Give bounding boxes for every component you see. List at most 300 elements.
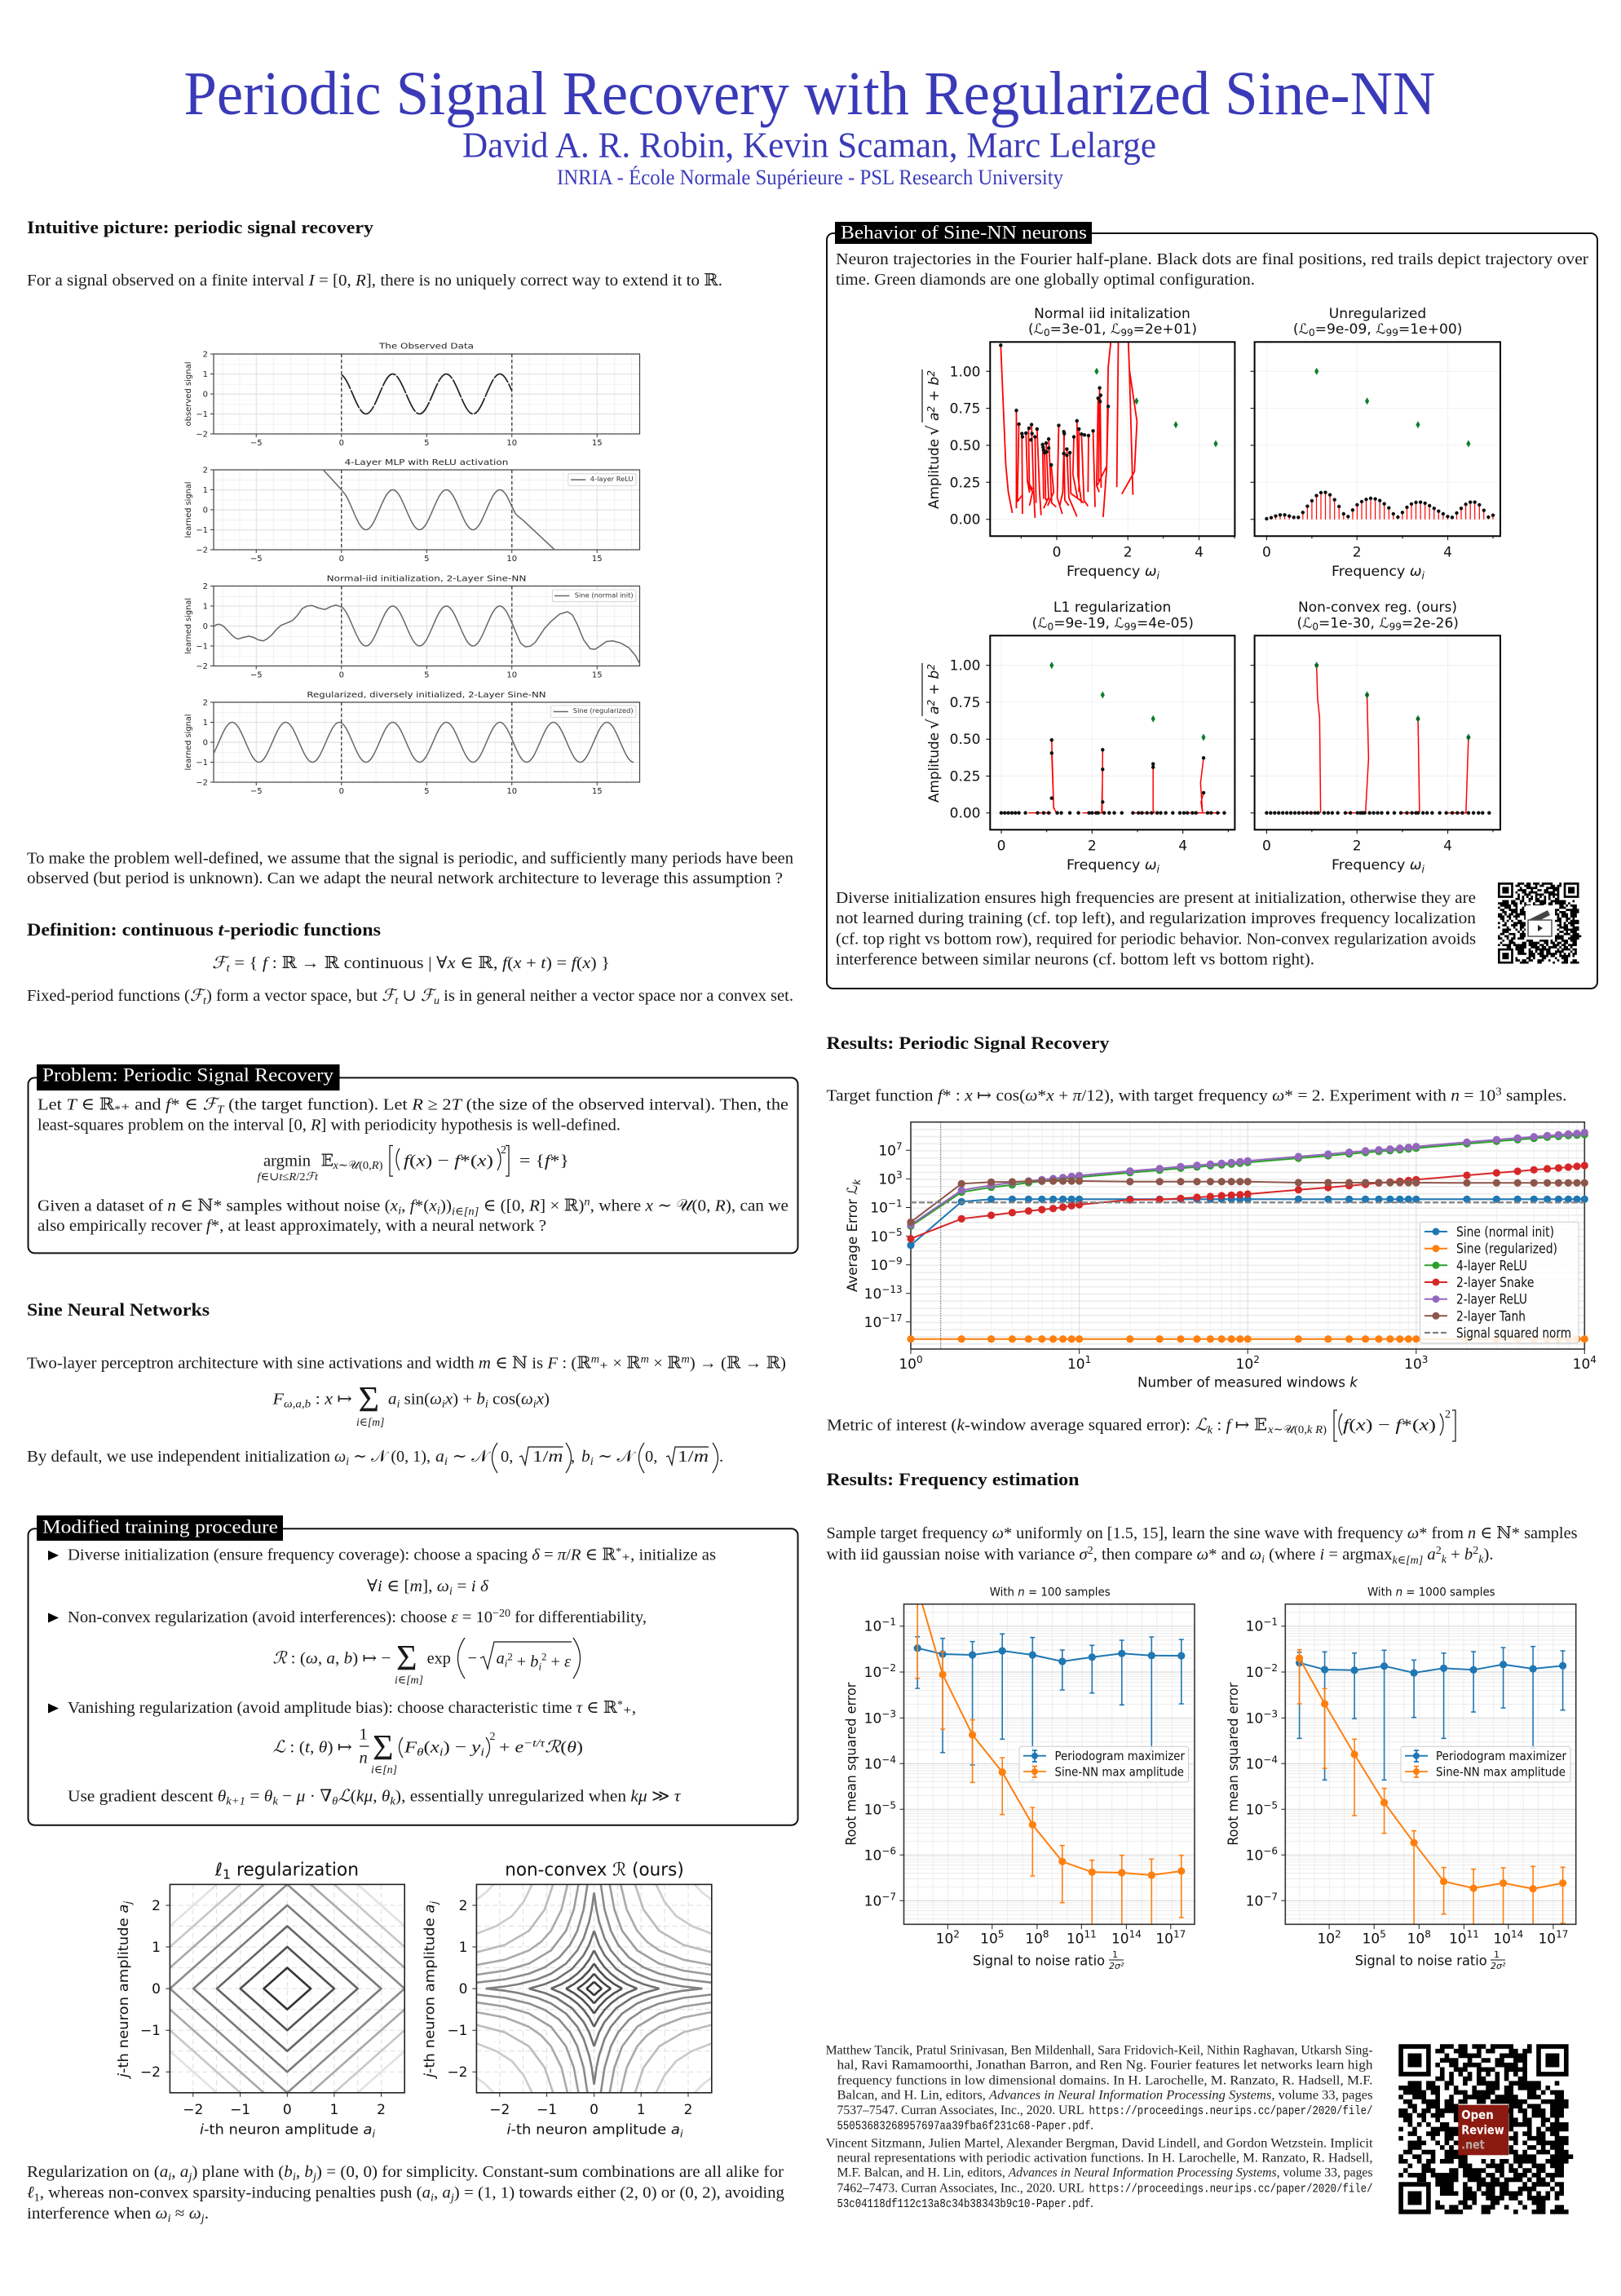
text: problem statement: R ≥ 2T (the size of the observed interval). Then, the bbox=[412, 1095, 761, 1113]
chart: average error vs windows: 10 bbox=[1236, 1356, 1253, 1373]
chart: frequency error with n=1000: −3 bbox=[1263, 1708, 1278, 1719]
text: regularization explanation bbox=[27, 2163, 784, 2225]
chart: non-convex regularization contours: −2 bbox=[447, 2064, 468, 2081]
text: default initialization: 0, bbox=[645, 1448, 657, 1466]
chart: frequency error with n=100: 17 bbox=[1173, 1929, 1186, 1940]
chart: frequency error with n=100: 14 bbox=[1129, 1929, 1142, 1940]
text: default initialization: i bbox=[346, 1456, 349, 1468]
chart: 4-layer MLP: 10 bbox=[506, 555, 517, 564]
bullet: non-convex regularization: Non-convex regularization (avoid interferences): choose ε = 10 bbox=[68, 1608, 492, 1626]
chart: non-convex regularization neurons: =2e-26) bbox=[1402, 615, 1459, 631]
chart: normal iid initialization: a bbox=[926, 413, 943, 421]
legend: 2-layer ReLU bbox=[1456, 1292, 1527, 1308]
affiliation: INRIA - École Normale Supérieure - PSL Research University bbox=[557, 166, 1063, 189]
heading: sine neural networks: Sine Neural Networks bbox=[27, 1299, 210, 1320]
chart: frequency error with n=1000: With n = 1000 samples bbox=[1367, 1586, 1495, 1599]
chart: normal iid initialization: 99 bbox=[1120, 327, 1133, 338]
bullet: vanishing regularization: Vanishing regularization (avoid amplitude bias): choose characteristic time τ ∈ ℝ bbox=[68, 1699, 617, 1717]
bullet: diverse initialization: = bbox=[453, 1577, 471, 1595]
chart: regularized sine NN: 10 bbox=[506, 787, 517, 796]
chart: frequency error with n=100: With n = 100 samples bbox=[990, 1586, 1111, 1599]
chart: normal-iid sine NN: −2 bbox=[196, 662, 208, 671]
chart: normal iid initialization: 2 bbox=[925, 406, 937, 413]
chart: l1 regularization contours: 1 bbox=[329, 2102, 338, 2118]
formula: periodic function space: t bbox=[227, 962, 231, 975]
text: sample target frequency: 2 bbox=[1088, 1545, 1093, 1557]
chart: L1 regularization neurons: =4e-05) bbox=[1137, 615, 1194, 631]
text: sample target frequency: ω* and ω bbox=[1197, 1546, 1261, 1564]
text: neuron trajectories: time. Green diamonds are one globally optimal configuration. bbox=[836, 271, 1255, 289]
chart: non-convex regularization contours bbox=[422, 1860, 735, 2140]
chart: frequency error with n=100: 10 bbox=[1067, 1931, 1084, 1948]
chart: 4-layer MLP: 5 bbox=[424, 555, 429, 564]
text: regularization explanation: , bbox=[296, 2163, 304, 2181]
text: problem statement bbox=[38, 1095, 788, 1134]
chart: frequency error with n=1000: 10 bbox=[1246, 1802, 1263, 1818]
chart: frequency error with n=100: 10 bbox=[1111, 1931, 1129, 1948]
formula: periodic function space: = { bbox=[230, 954, 263, 972]
chart: frequency error with n=1000: 14 bbox=[1511, 1929, 1523, 1940]
chart: frequency error with n=1000: 10 bbox=[1246, 1847, 1263, 1864]
series: 4-layer ReLU bbox=[911, 1135, 1584, 1226]
text: regularization explanation: a bbox=[442, 2183, 451, 2201]
formula: argmin: = {f*} bbox=[519, 1152, 569, 1170]
chart: frequency error with n=1000: −7 bbox=[1263, 1891, 1278, 1902]
text: fixed-period functions: ℱ bbox=[421, 987, 437, 1005]
chart: frequency error with n=1000: Root mean squared error bbox=[1226, 1683, 1242, 1846]
text: sample target frequency: i = argmax bbox=[1319, 1546, 1392, 1564]
formula: sine network bbox=[272, 1379, 550, 1429]
chart: normal-iid sine NN: 0 bbox=[339, 670, 344, 680]
heading: definition: Definition: continuous t-periodic functions bbox=[27, 919, 381, 940]
bullet: vanishing regularization: = bbox=[245, 1787, 264, 1805]
text: fixed-period functions: ) form a vector space, but bbox=[206, 987, 382, 1005]
chart: observed data: 1 bbox=[203, 370, 208, 379]
chart: normal-iid sine NN bbox=[184, 575, 639, 680]
chart: frequency error with n=1000: 11 bbox=[1467, 1929, 1479, 1940]
chart: observed data: −1 bbox=[196, 410, 208, 419]
bullet: non-convex regularization: − bbox=[468, 1649, 477, 1667]
text: well-defined problem bbox=[27, 849, 793, 887]
bullet: diverse initialization: * bbox=[616, 1546, 621, 1559]
chart: average error vs windows: 10 bbox=[864, 1286, 881, 1303]
text: regularization explanation: i bbox=[431, 2192, 434, 2204]
chart: observed data: 5 bbox=[424, 439, 429, 448]
bullet: vanishing regularization: * bbox=[617, 1699, 623, 1711]
legend: Periodogram maximizer bbox=[1055, 1749, 1186, 1763]
text: two-layer perceptron: ) → (ℝ → ℝ) bbox=[690, 1354, 786, 1372]
chart: non-convex regularization neurons: =1e-30, ℒ bbox=[1318, 615, 1389, 631]
chart: average error vs windows: 4 bbox=[1590, 1354, 1597, 1365]
references: 53c04118df112c13a8c34b38343b9c10-Paper.pdf bbox=[837, 2197, 1091, 2211]
panel heading: problem bbox=[37, 1064, 339, 1090]
text: fixed-period functions: ∪ bbox=[398, 987, 421, 1005]
chart: l1 regularization contours: −1 bbox=[230, 2102, 250, 2118]
legend: Periodogram maximizer bbox=[1436, 1749, 1567, 1763]
bullet: vanishing regularization: θ bbox=[417, 1746, 424, 1758]
chart: L1 regularization neurons: 2 bbox=[925, 664, 937, 670]
chart: frequency error with n=100: 10 bbox=[936, 1931, 953, 1948]
chart: frequency error with n=100: Root mean squared error bbox=[844, 1683, 860, 1846]
icon: OpenReview QR code bbox=[1398, 2044, 1573, 2214]
legend bbox=[1401, 1746, 1570, 1782]
bullet: non-convex regularization: −20 bbox=[492, 1608, 510, 1620]
text: default initialization: ω bbox=[334, 1448, 346, 1466]
panel heading: modified training bbox=[37, 1515, 283, 1541]
chart: L1 regularization neurons: 2 bbox=[1088, 838, 1097, 855]
chart: non-convex regularization neurons: (ℒ bbox=[1296, 615, 1312, 631]
chart: average error vs windows: Number of measured windows k bbox=[1137, 1375, 1358, 1391]
bullet: vanishing regularization: ℒ : (t, θ) ↦ bbox=[272, 1738, 352, 1756]
formula: argmin: f(x) − f*(x) bbox=[404, 1152, 493, 1170]
chart: average error vs windows: k bbox=[851, 1179, 863, 1185]
chart: non-convex regularization neurons: i bbox=[1422, 864, 1425, 875]
text: regularization explanation: j bbox=[311, 2171, 316, 2183]
bullet: diverse initialization: ₊, initialize as bbox=[621, 1546, 716, 1564]
chart: unregularized: =9e-09, ℒ bbox=[1315, 321, 1386, 338]
legend: Sine-NN max amplitude bbox=[1436, 1765, 1566, 1780]
chart: non-convex regularization neurons: 0 bbox=[1262, 838, 1271, 855]
chart: unregularized: (ℒ bbox=[1293, 321, 1309, 338]
bullet: non-convex regularization: + bbox=[513, 1652, 530, 1670]
chart: frequency error with n=100: 10 bbox=[864, 1710, 881, 1727]
references: 7462–7473. Curran Associates, Inc., 2020. URL bbox=[837, 2181, 1084, 2195]
chart: regularized sine NN: 0 bbox=[203, 739, 208, 747]
references: https://proceedings.neurips.cc/paper/2020/file/ bbox=[1089, 2182, 1373, 2196]
chart: regularized sine NN: −5 bbox=[250, 787, 263, 796]
chart: l1 regularization contours: −1 bbox=[140, 2023, 161, 2039]
formula: sine network: ω,a,b bbox=[284, 1398, 311, 1410]
chart: average error vs windows: −5 bbox=[888, 1227, 903, 1238]
chart: L1 regularization neurons: 4 bbox=[1178, 838, 1187, 855]
text: regularization explanation: a bbox=[180, 2163, 188, 2181]
references: . bbox=[1090, 2196, 1093, 2210]
chart: observed data bbox=[184, 343, 639, 448]
chart: frequency error with n=1000: −2 bbox=[1263, 1662, 1278, 1674]
chart: L1 regularization neurons: L1 regularization bbox=[1053, 599, 1171, 616]
text: sample target frequency: b bbox=[1464, 1546, 1473, 1564]
formula: sine network: i bbox=[533, 1398, 537, 1410]
text: default initialization: a bbox=[435, 1448, 444, 1466]
authors: David A. R. Robin, Kevin Scaman, Marc Lelarge bbox=[462, 126, 1156, 166]
chart: average error vs windows: 10 bbox=[1404, 1356, 1422, 1373]
chart: average error vs windows: −13 bbox=[881, 1284, 903, 1295]
chart: 4-layer MLP: −1 bbox=[196, 526, 208, 535]
chart: L1 regularization neurons: 0.50 bbox=[950, 732, 980, 748]
text: two-layer perceptron: m bbox=[681, 1354, 690, 1365]
chart: 4-layer MLP: 0 bbox=[203, 506, 208, 515]
chart: regularized sine NN bbox=[184, 691, 639, 796]
formula: argmin: x∼𝒰(0,R) bbox=[332, 1160, 383, 1172]
chart: non-convex regularization contours: i-th neuron amplitude a bbox=[507, 2122, 679, 2139]
chart: normal iid initialization: 0.00 bbox=[950, 512, 980, 529]
text: default initialization: ∼ 𝒩 bbox=[594, 1448, 637, 1466]
chart: frequency error with n=100: 10 bbox=[864, 1665, 881, 1681]
chart: l1 regularization contours: 1 bbox=[152, 1940, 161, 1956]
chart: observed data: 10 bbox=[506, 439, 517, 448]
chart: normal iid initialization: (ℒ bbox=[1028, 321, 1044, 338]
formula: sine network: ) + b bbox=[453, 1390, 485, 1408]
text: initialization and regularization discussion: not learned during training (cf. top left), and regularization improves frequency localization bbox=[836, 909, 1476, 927]
text: regularization explanation: ) plane with ( bbox=[192, 2163, 284, 2181]
text: regularization explanation: b bbox=[304, 2163, 313, 2181]
legend: Sine (normal init) bbox=[1456, 1224, 1554, 1241]
text: two-layer perceptron: m bbox=[641, 1354, 649, 1365]
bullet: vanishing regularization: ( bbox=[424, 1738, 431, 1756]
bullet: vanishing regularization: F bbox=[404, 1738, 417, 1756]
bullet: vanishing regularization: y bbox=[470, 1738, 481, 1756]
formula: sine network: ω bbox=[521, 1390, 533, 1408]
chart: frequency error with n=100: −7 bbox=[881, 1891, 896, 1902]
chart: observed data: −2 bbox=[196, 431, 208, 439]
text: initialization and regularization discussion: (cf. top right vs bottom row), required for periodic behavior. Non-convex regularization avoids bbox=[836, 931, 1476, 949]
text: default initialization: ∼ 𝒩 (0, 1), bbox=[349, 1448, 431, 1466]
panel heading: problem: Problem: Periodic Signal Recovery bbox=[42, 1065, 334, 1086]
text: sample target frequency: k∈[m] bbox=[1393, 1555, 1423, 1567]
text: target function: samples. bbox=[1502, 1086, 1567, 1104]
bullet: non-convex regularization: exp bbox=[427, 1649, 451, 1667]
text: metric of interest: Metric of interest ( k-window average squared error): ℒ bbox=[827, 1416, 1207, 1434]
text: default initialization: 1/m bbox=[532, 1448, 563, 1466]
text: metric of interest: f ↦ 𝔼 bbox=[1226, 1416, 1266, 1434]
chart: non-convex regularization contours: −2 bbox=[489, 2102, 510, 2118]
text: problem statement: least-squares problem on the interval [0, R] with periodicity hypothesis is well-defined. bbox=[38, 1116, 621, 1134]
chart: normal-iid sine NN: 2 bbox=[203, 582, 208, 591]
formula: sine network: sin( bbox=[400, 1390, 430, 1408]
chart: non-convex regularization neurons: Non-convex reg. (ours) bbox=[1298, 599, 1457, 616]
formula: sine network: cos( bbox=[488, 1390, 521, 1408]
chart: L1 regularization neurons: (ℒ bbox=[1032, 615, 1048, 631]
references bbox=[826, 2043, 1373, 2211]
bullet: non-convex regularization: ℛ : (ω, a, b) ↦ − bbox=[272, 1649, 391, 1667]
chart: normal-iid sine NN: 10 bbox=[506, 670, 517, 680]
chart: 4-layer MLP: −5 bbox=[250, 555, 263, 564]
chart: observed data: −5 bbox=[250, 439, 263, 448]
text: sample target frequency: 2 bbox=[1436, 1545, 1442, 1557]
chart: L1 regularization neurons: 0.00 bbox=[950, 806, 980, 822]
chart: frequency error with n=100: 10 bbox=[1025, 1931, 1043, 1948]
chart: frequency error with n=100: 10 bbox=[864, 1756, 881, 1772]
chart: normal-iid sine NN: 5 bbox=[424, 670, 429, 680]
legend: 4-layer ReLU bbox=[1456, 1258, 1527, 1274]
chart: normal-iid sine NN: learned signal bbox=[184, 598, 193, 654]
chart: frequency error with n=100: −1 bbox=[881, 1617, 896, 1628]
chart: unregularized: 99 bbox=[1386, 327, 1398, 338]
chart: 4-layer MLP: 2 bbox=[203, 467, 208, 475]
chart: unregularized bbox=[1251, 306, 1500, 582]
bullet: non-convex regularization: ε bbox=[564, 1652, 572, 1670]
chart: frequency error with n=1000: 2 bbox=[1335, 1929, 1341, 1940]
text: default initialization bbox=[27, 1443, 723, 1473]
chart: 4-layer MLP: 4-Layer MLP with ReLU activation bbox=[345, 458, 508, 467]
chart: frequency error with n=1000: −5 bbox=[1263, 1799, 1278, 1811]
chart: frequency error with n=100: 2σ² bbox=[1109, 1961, 1124, 1971]
legend: 2-layer Tanh bbox=[1456, 1308, 1526, 1325]
text: regularization explanation: b bbox=[284, 2163, 293, 2181]
formula: sine network: i bbox=[485, 1398, 488, 1410]
chart: frequency error with n=100: 10 bbox=[1155, 1931, 1173, 1948]
chart: non-convex regularization contours: j-th neuron amplitude a bbox=[422, 1904, 439, 2077]
bullet: vanishing regularization: ℒ bbox=[338, 1787, 351, 1805]
chart: regularized sine NN: Regularized, diversely initialized, 2-Layer Sine-NN bbox=[307, 691, 546, 700]
text: regularization explanation: j bbox=[449, 2192, 454, 2204]
text: regularization explanation: ω bbox=[189, 2205, 201, 2223]
text: regularization explanation: interference when ω bbox=[27, 2205, 167, 2223]
chart: L1 regularization neurons: =9e-19, ℒ bbox=[1053, 615, 1124, 631]
bullet: non-convex regularization: i bbox=[538, 1660, 541, 1672]
text: regularization explanation: ) = (0, 0) for simplicity. Constant-sum combinations are all alike for bbox=[316, 2163, 784, 2181]
chart: frequency error with n=100: 10 bbox=[864, 1893, 881, 1909]
chart: observed data: 2 bbox=[203, 351, 208, 359]
chart: normal iid initialization: =2e+01) bbox=[1133, 321, 1197, 338]
formula: periodic function space: ℱ bbox=[212, 954, 230, 972]
bullet: vanishing regularization: (kμ, θ bbox=[351, 1787, 390, 1805]
icon: OpenReview QR code: .net bbox=[1461, 2138, 1485, 2152]
icon: OpenReview QR code: Open bbox=[1461, 2108, 1494, 2122]
series: sine regularized bbox=[911, 1338, 1584, 1340]
bullet: non-convex regularization: a bbox=[497, 1649, 505, 1667]
chart: frequency error with n=1000: 10 bbox=[1493, 1931, 1511, 1948]
chart: l1 regularization contours: 0 bbox=[283, 2102, 292, 2118]
chart: non-convex regularization contours: i bbox=[680, 2129, 683, 2140]
chart: observed data: 15 bbox=[592, 439, 603, 448]
chart: L1 regularization neurons: 0.25 bbox=[950, 768, 980, 785]
chart: frequency error with n=100: −5 bbox=[881, 1799, 896, 1811]
chart: average error vs windows: 0 bbox=[917, 1354, 923, 1365]
references: Matthew Tancik, Pratul Srinivasan, Ben Mildenhall, Sara Fridovich-Keil, Nithin Raghavan, Utkarsh Sing- bbox=[826, 2043, 1373, 2057]
chart: L1 regularization neurons: 0 bbox=[1048, 621, 1053, 632]
chart: unregularized: 4 bbox=[1443, 545, 1452, 561]
chart: unregularized: 2 bbox=[1353, 545, 1362, 561]
formula: sine network: F bbox=[272, 1390, 284, 1408]
bullet: vanishing regularization: ) − bbox=[444, 1738, 471, 1756]
chart: regularized sine NN: −1 bbox=[196, 759, 208, 768]
chart: normal iid initialization: i bbox=[1157, 570, 1160, 582]
text: target function: Target function f* : x ↦ cos(ω*x + π/12), with target frequency ω* = 2. Experiment with n = 10 bbox=[827, 1086, 1494, 1104]
chart: non-convex regularization contours: 1 bbox=[459, 1940, 468, 1956]
text: fixed-period functions: u bbox=[434, 995, 439, 1007]
text: empirical question: R] × ℝ) bbox=[529, 1197, 583, 1215]
chart: observed data: observed signal bbox=[184, 362, 193, 426]
chart: non-convex regularization contours: 2 bbox=[459, 1898, 468, 1914]
text: fixed-period functions: t bbox=[203, 995, 207, 1007]
text: regularization explanation: j bbox=[200, 2213, 205, 2225]
formula: sine network: i bbox=[442, 1398, 445, 1410]
chart: L1 regularization neurons: 0.75 bbox=[950, 695, 980, 711]
chart: frequency error with n=1000: 10 bbox=[1449, 1931, 1467, 1948]
chart: regularized sine NN: Sine (regularized) bbox=[573, 707, 634, 714]
series: 2-layer ReLU bbox=[911, 1132, 1584, 1225]
chart: regularized sine NN: 1 bbox=[203, 719, 208, 728]
chart: normal-iid sine NN: −5 bbox=[250, 670, 263, 680]
chart: l1 regularization contours: 2 bbox=[377, 2102, 386, 2118]
text: sample target frequency: with iid gaussian noise with variance σ bbox=[827, 1546, 1088, 1564]
chart: average error vs windows: 10 bbox=[878, 1144, 896, 1160]
chart: 4-layer MLP: 15 bbox=[592, 555, 603, 564]
chart: average error vs windows: −1 bbox=[888, 1198, 903, 1210]
bullet: vanishing regularization: i bbox=[480, 1746, 484, 1758]
chart: frequency error with n=100: 10 bbox=[864, 1619, 881, 1635]
chart: normal iid initialization: 1.00 bbox=[950, 364, 980, 380]
text: default initialization: ∼ 𝒩 bbox=[448, 1448, 492, 1466]
chart: frequency error with n=100: −3 bbox=[881, 1708, 896, 1719]
chart: normal-iid sine NN: 1 bbox=[203, 602, 208, 612]
chart: L1 regularization neurons: Amplitude bbox=[926, 732, 943, 803]
text: default initialization: i bbox=[590, 1456, 594, 1468]
chart: normal iid initialization: 0.50 bbox=[950, 438, 980, 454]
text: sample target frequency: 2 bbox=[1473, 1545, 1478, 1557]
chart: average error vs windows: 10 bbox=[1573, 1356, 1590, 1373]
references: hal, Ravi Ramamoorthi, Jonathan Barron, and Ren Ng. Fourier features let networks learn high bbox=[837, 2059, 1373, 2073]
bullet: non-convex regularization: b bbox=[530, 1652, 538, 1670]
text: sample target frequency: , then compare bbox=[1093, 1546, 1197, 1564]
bullet: vanishing regularization: ), essentially unregularized when bbox=[395, 1787, 630, 1805]
chart: average error vs windows: 10 bbox=[870, 1229, 888, 1245]
chart: normal-iid sine NN: Normal-iid initialization, 2-Layer Sine-NN bbox=[327, 575, 526, 584]
formula: sine network: i∈[m] bbox=[356, 1417, 384, 1429]
chart: average error vs windows: 10 bbox=[1067, 1356, 1085, 1373]
chart: normal-iid sine NN: Sine (normal init) bbox=[575, 591, 634, 599]
chart: non-convex regularization contours: j bbox=[429, 1900, 440, 1906]
chart: frequency error with n=1000: 10 bbox=[1538, 1931, 1556, 1948]
bullet: vanishing regularization: k bbox=[390, 1795, 396, 1807]
formula: sine network: ω bbox=[430, 1390, 442, 1408]
legend: Sine-NN max amplitude bbox=[1055, 1765, 1184, 1780]
chart: frequency error with n=1000: −6 bbox=[1263, 1845, 1278, 1856]
chart: normal-iid sine NN: 15 bbox=[592, 670, 603, 680]
bullet: diverse initialization: i δ bbox=[471, 1577, 488, 1595]
series: sine normal init bbox=[911, 1199, 1584, 1245]
legend: 2-layer Snake bbox=[1456, 1275, 1534, 1291]
text: well-defined problem: To make the problem well-defined, we assume that the signal is periodic, and sufficiently many periods have been bbox=[27, 849, 793, 867]
bullet: vanishing regularization: kμ ≫ τ bbox=[630, 1787, 680, 1805]
text: initialization and regularization discussion: interference between similar neurons (cf. bottom left vs bottom right). bbox=[836, 951, 1314, 969]
chart: average error vs windows: 7 bbox=[896, 1141, 903, 1152]
chart: frequency error with n=100: 11 bbox=[1084, 1929, 1097, 1940]
text: sample target frequency: k bbox=[1442, 1554, 1447, 1566]
text: default initialization: By default, we use independent initialization bbox=[27, 1448, 330, 1466]
chart: non-convex regularization neurons: 4 bbox=[1443, 838, 1452, 855]
text: target function: 3 bbox=[1495, 1086, 1502, 1098]
chart: average error vs windows: 10 bbox=[899, 1356, 917, 1373]
references: Vincent Sitzmann, Julien Martel, Alexander Bergman, David Lindell, and Gordon Wetzstein. Implicit bbox=[826, 2136, 1373, 2150]
heading: results frequency estimation: Results: Frequency estimation bbox=[827, 1469, 1080, 1489]
legend bbox=[1420, 1222, 1579, 1343]
legend: Sine (regularized) bbox=[1456, 1241, 1557, 1258]
chart: l1 regularization contours: j-th neuron amplitude a bbox=[116, 1904, 132, 2077]
formula: sine network: a bbox=[388, 1390, 396, 1408]
chart: unregularized: 0 bbox=[1309, 327, 1315, 338]
chart: non-convex regularization neurons: 0 bbox=[1312, 621, 1318, 632]
chart: frequency error with n=1000: 10 bbox=[1246, 1893, 1263, 1909]
formula: sine network: x bbox=[444, 1390, 453, 1408]
chart: frequency error with n=100: 10 bbox=[864, 1847, 881, 1864]
chart: normal-iid sine NN: 0 bbox=[203, 622, 208, 631]
chart: unregularized: Frequency ω bbox=[1332, 564, 1421, 580]
text: empirical question: ∈ ([0, bbox=[479, 1197, 529, 1215]
chart: l1 regularization contours: i bbox=[372, 2129, 376, 2140]
text: two-layer perceptron: Two-layer perceptron architecture with sine activations and width m ∈ ℕ is F : (ℝ bbox=[27, 1354, 590, 1372]
icon: video QR code bbox=[1498, 883, 1581, 964]
bullet: vanishing regularization: ₊, bbox=[623, 1699, 636, 1717]
chart: 4-layer MLP: 0 bbox=[339, 555, 344, 564]
text: empirical question: i bbox=[398, 1206, 401, 1218]
text: empirical question: i bbox=[437, 1206, 440, 1218]
text: regularization explanation: a bbox=[422, 2183, 431, 2201]
bullet: non-convex regularization: i bbox=[505, 1657, 508, 1669]
chart: average error vs windows: −9 bbox=[888, 1255, 903, 1267]
text: sample target frequency: Sample target frequency ω* uniformly on [1.5, 15], learn the sine wave with frequency ω* from n ∈ ℕ* samples bbox=[827, 1524, 1578, 1542]
